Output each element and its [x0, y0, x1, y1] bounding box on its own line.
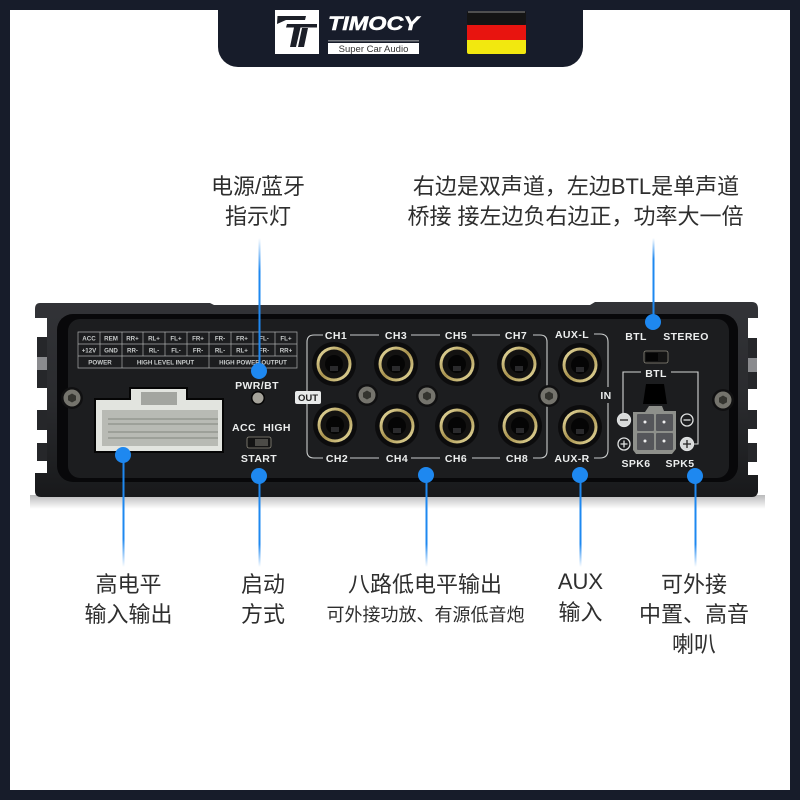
- callout: high level input/output: 输入输出: [84, 602, 173, 627]
- callout: eight-channel low level output: 可外接功放、有源低音炮: [326, 605, 524, 625]
- channel labels: CH6: [445, 453, 467, 465]
- polarity symbols: [618, 414, 694, 450]
- callout: external centre / tweeter speakers: [639, 468, 749, 657]
- start mode switch: [247, 437, 271, 448]
- wiring table: POWER: [88, 360, 112, 366]
- mode switch: [644, 351, 668, 363]
- device ground shadow: [30, 495, 765, 509]
- left heat-sink notches: [35, 318, 47, 473]
- AUX labels: IN: [600, 390, 612, 402]
- BTL label: BTL: [645, 368, 667, 380]
- callout: start mode: 启动: [241, 572, 285, 597]
- wiring table: REM: [104, 336, 118, 342]
- black face plate: [57, 314, 738, 482]
- wiring table: RR-: [127, 348, 138, 354]
- ACC HIGH label: ACC: [232, 422, 256, 434]
- wiring table: RR+: [280, 348, 293, 354]
- AUX labels: [554, 329, 612, 465]
- PWR/BT label: PWR/BT: [235, 380, 279, 392]
- centre screws: [356, 384, 560, 407]
- wiring table: FL-: [171, 348, 181, 354]
- wiring table: RL-: [215, 348, 225, 354]
- BTL bracket: [623, 372, 698, 444]
- wiring table: FR-: [259, 348, 269, 354]
- channel labels: CH4: [386, 453, 408, 465]
- callout: start mode: [241, 468, 285, 627]
- wiring table: FL-: [259, 336, 269, 342]
- callout: start mode: 方式: [241, 602, 285, 627]
- AUX labels: AUX-R: [554, 453, 590, 465]
- tagline: Super Car Audio: [339, 44, 408, 55]
- mode labels: BTL: [625, 331, 647, 343]
- callout: external centre / tweeter speakers: 中置、高音: [639, 602, 749, 627]
- wiring table: FR-: [215, 336, 225, 342]
- callout: AUX input: [558, 467, 603, 625]
- speaker connector: [633, 384, 676, 454]
- wiring table: RL+: [148, 336, 160, 342]
- wiring table: RR+: [126, 336, 139, 342]
- speaker labels: SPK6: [621, 458, 651, 470]
- AUX labels: AUX-L: [555, 329, 589, 341]
- logo mark: [275, 10, 319, 54]
- brand name: TIMOCY: [328, 14, 422, 35]
- OUT tag: OUT: [298, 393, 318, 404]
- AUX jacks: [558, 343, 602, 449]
- callout: AUX input: AUX: [558, 569, 603, 594]
- callout: high level input/output: [84, 447, 173, 627]
- AUX bracket: [594, 334, 608, 458]
- wiring table: FL+: [280, 336, 292, 342]
- output channel bracket: [307, 335, 547, 458]
- right heat-sink notches: [748, 318, 758, 475]
- AUX section: [554, 329, 612, 465]
- callout: BTL bridge: [407, 174, 744, 330]
- callout: external centre / tweeter speakers: 可外接: [661, 572, 727, 597]
- high-level input connector: [95, 388, 223, 452]
- ACC HIGH label: HIGH: [263, 422, 291, 434]
- callout: high level input/output: 高电平: [95, 572, 162, 597]
- callout: power / bluetooth indicator: 指示灯: [225, 204, 291, 229]
- channel labels: CH7: [505, 330, 527, 342]
- banner background: [218, 0, 583, 67]
- callout: BTL bridge: 桥接 接左边负右边正，功率大一倍: [407, 204, 744, 229]
- wiring table: FL+: [170, 336, 182, 342]
- channel labels: CH1: [325, 330, 347, 342]
- channel labels: CH2: [326, 453, 348, 465]
- wiring table: GND: [104, 348, 118, 354]
- channel labels: [325, 330, 528, 465]
- BTL / STEREO section: [618, 331, 709, 470]
- callout: BTL bridge: 右边是双声道，左边BTL是单声道: [413, 174, 739, 199]
- callout: eight-channel low level output: 八路低电平输出: [348, 572, 502, 597]
- wiring table: RL-: [149, 348, 159, 354]
- callout: external centre / tweeter speakers: 喇叭: [672, 632, 716, 657]
- channel labels: CH5: [445, 330, 467, 342]
- brand banner: [218, 0, 583, 67]
- wiring table: HIGH LEVEL INPUT: [137, 360, 194, 366]
- channel labels: CH3: [385, 330, 407, 342]
- wiring table: ACC: [82, 336, 96, 342]
- device: rear panel: [30, 302, 765, 509]
- wiring table: FR-: [193, 348, 203, 354]
- RCA jacks CH1-CH8: [312, 342, 542, 448]
- wiring table: +12V: [82, 348, 97, 354]
- speaker labels: SPK5: [665, 458, 695, 470]
- callout: power / bluetooth indicator: 电源/蓝牙: [211, 174, 305, 199]
- OUT tag: [295, 391, 321, 404]
- mode labels: STEREO: [663, 331, 709, 343]
- wiring table: HIGH POWER OUTPUT: [219, 360, 287, 366]
- aluminium housing: [35, 302, 758, 497]
- callout: eight-channel low level output: [326, 467, 524, 625]
- left screw: [61, 387, 83, 409]
- callout: AUX input: 输入: [558, 600, 603, 625]
- wiring table: [78, 332, 297, 368]
- tagline: [328, 40, 419, 55]
- wiring table: RL+: [236, 348, 248, 354]
- wiring table: FR+: [236, 336, 248, 342]
- callout: power / bluetooth indicator: [211, 174, 305, 379]
- power indicator LED: [251, 391, 265, 405]
- icon: German flag: [467, 11, 526, 54]
- channel labels: CH8: [506, 453, 528, 465]
- START label: START: [241, 453, 277, 465]
- wiring table: FR+: [192, 336, 204, 342]
- right screw: [712, 389, 734, 411]
